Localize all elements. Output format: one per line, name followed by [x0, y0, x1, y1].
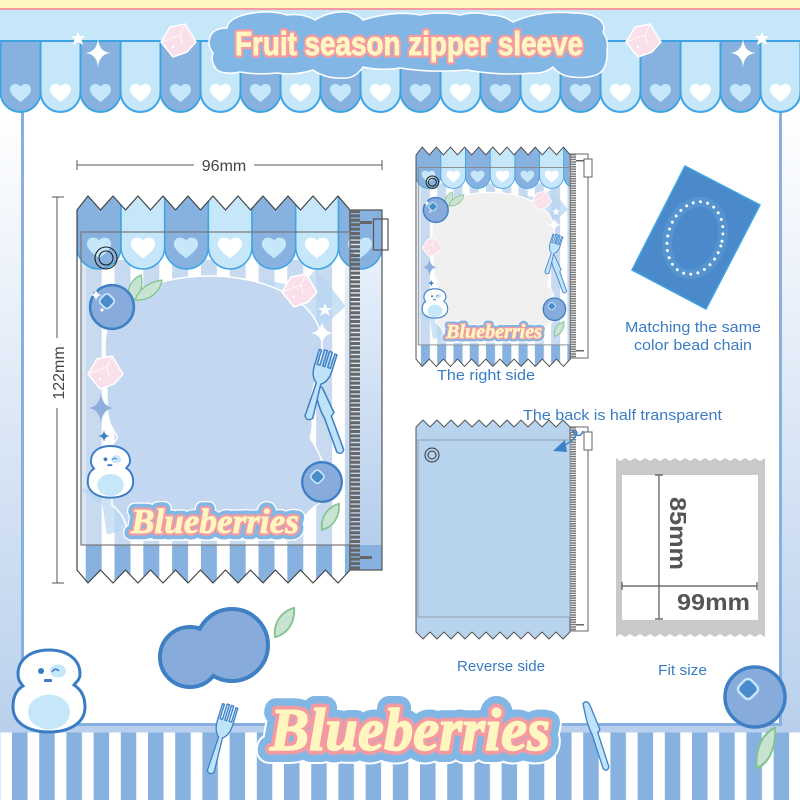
icon: top right sparkle: [730, 38, 756, 68]
main sleeve logo: Blueberries: [130, 502, 299, 541]
footer band and stripes: [0, 723, 800, 800]
right side logo: Blueberries: [445, 321, 542, 343]
right side logo: Blueberries: [445, 321, 542, 343]
arrow: to back of sleeve: [553, 431, 583, 452]
side panel: right: [779, 110, 800, 732]
label: reverse side: Reverse side: [457, 658, 545, 675]
dimension: 96mm width: 96mm: [202, 158, 246, 175]
right side logo: Blueberries: [445, 321, 542, 343]
icon: left ice cube: [161, 24, 196, 57]
title banner: [209, 12, 608, 78]
footer logo: Blueberries: [269, 697, 550, 763]
main sleeve window: [105, 276, 325, 540]
icon: fork: [202, 703, 238, 776]
icon: blueberry: [725, 667, 785, 727]
icon: leaf: [757, 728, 775, 768]
top band: [0, 0, 800, 42]
icon: top right star: [755, 32, 769, 45]
icon: leaf by blob: [275, 608, 294, 637]
side panel: left: [0, 110, 24, 732]
main sleeve logo: Blueberries: [130, 502, 299, 541]
main sleeve eyelet: [95, 247, 117, 269]
icon: mascot: [13, 650, 85, 732]
fit width value: 99mm: [677, 589, 750, 615]
footer logo: Blueberries: [269, 697, 550, 763]
label: back is half transparent: The back is half transparent: [523, 407, 723, 424]
panel: reverse side sleeve: [416, 420, 592, 639]
icon: top left star: [71, 32, 85, 45]
dimension: 122mm height: 122mm: [51, 346, 68, 400]
main sleeve logo: Blueberries: [130, 502, 299, 541]
footer logo: Blueberries: [269, 697, 550, 763]
dimension: 96mm width: [77, 158, 382, 175]
panel: main sleeve: [70, 190, 390, 590]
panel: bead chain card: [632, 166, 760, 309]
title banner: Fruit season zipper sleeve: [235, 25, 583, 62]
main sleeve logo: Blueberries: [130, 502, 299, 541]
icon: knife: [581, 700, 612, 771]
awning scallops: [0, 41, 800, 112]
panel: fit size diagram: [616, 458, 765, 637]
label: fit size: Fit size: [658, 662, 707, 679]
fit height value: 85mm: [665, 497, 691, 570]
icon: top left sparkle: [86, 38, 110, 68]
title banner: Fruit season zipper sleeve: [235, 25, 583, 62]
right side logo: Blueberries: [445, 321, 542, 343]
main sleeve zipper: [355, 210, 388, 570]
dimension: 122mm height: [51, 197, 68, 583]
footer logo: Blueberries: [269, 697, 550, 763]
label: bead chain: Matching the same: [625, 319, 761, 336]
icon: blueberries blob: [160, 609, 268, 687]
label: bead chain: color bead chain: [634, 337, 752, 354]
panel: right side sleeve: [412, 144, 593, 370]
label: bead chain: [625, 319, 761, 354]
icon: right ice cube: [626, 24, 661, 57]
label: the right side: The right side: [437, 367, 535, 384]
